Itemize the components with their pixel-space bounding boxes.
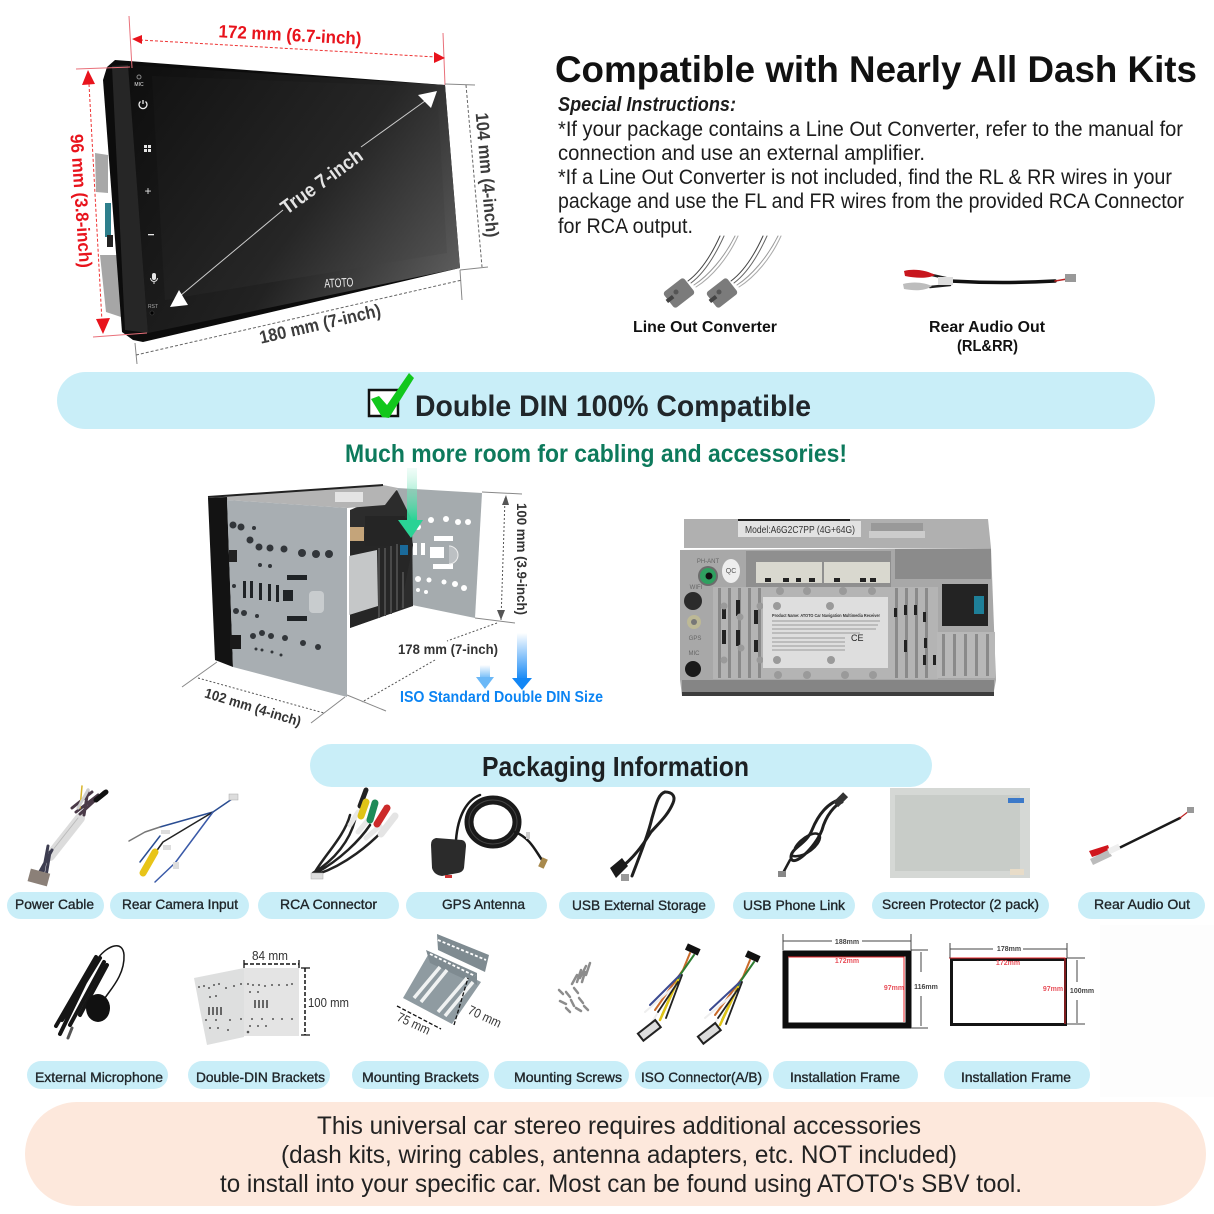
special instructions text: Special Instructions:	[558, 94, 736, 116]
faint panel at right edge	[1100, 925, 1214, 1097]
icon: gps antenna	[431, 795, 548, 878]
banner: double din compatible	[57, 372, 1155, 429]
left side bracket	[227, 500, 347, 697]
iso standard label: ISO Standard Double DIN Size	[400, 689, 603, 706]
pill: iso connector	[635, 1061, 769, 1089]
icon: brackets with dimensions	[194, 949, 349, 1045]
notice text: This universal car stereo requires additional accessories	[317, 1112, 921, 1140]
pill: installation frame: Installation Frame	[790, 1069, 900, 1085]
special instructions text: *If a Line Out Converter is not included, find the RL & RR wires in your	[558, 166, 1172, 189]
pill: usb external storage	[559, 892, 715, 919]
din connector	[942, 584, 988, 626]
icon: usb phone cable	[778, 792, 848, 877]
pill: gps antenna: GPS Antenna	[442, 896, 525, 912]
pill: mounting brackets: Mounting Brackets	[362, 1069, 479, 1085]
pill: power cable: Power Cable	[15, 896, 94, 912]
packaging heading: Packaging Information	[482, 751, 749, 782]
icon: iso connector a	[638, 943, 701, 1041]
banner: packaging information	[310, 744, 932, 787]
special instructions text: for RCA output.	[558, 215, 693, 238]
pill: mounting brackets	[352, 1061, 489, 1089]
diagram: frame 178 mm: 178mm	[997, 946, 1021, 953]
item: rca connector	[258, 790, 399, 919]
touch buttons: +	[144, 184, 152, 198]
diagram: frame 188 mm	[783, 934, 938, 1028]
icon: usb storage cable	[610, 792, 674, 881]
item: power cable	[7, 786, 106, 919]
dimension: width 180 mm: 180 mm (7-inch)	[257, 300, 383, 348]
callout: additional accessories notice	[25, 1102, 1206, 1206]
ports: PH-ANT	[697, 559, 719, 565]
item: mounting screws	[494, 963, 629, 1089]
item: external microphone	[27, 946, 168, 1089]
chassis body	[680, 548, 996, 696]
product label: CE	[851, 633, 864, 643]
notice text: to install into your specific car. Most can be found using ATOTO's SBV tool.	[220, 1170, 1022, 1198]
icon: brackets with dimensions: 84 mm	[252, 949, 288, 963]
dimension: width 180 mm	[135, 270, 462, 364]
pill: rca connector	[258, 892, 399, 919]
banner text: Double DIN 100% Compatible	[415, 390, 811, 423]
blue iso arrows	[476, 633, 532, 690]
top plate with model sticker: Model:A6G2C7PP (4G+64G)	[745, 524, 855, 536]
icon: mounting bracket: 75 mm	[395, 1009, 433, 1038]
dimension: 178 mm: 178 mm (7-inch)	[398, 641, 498, 657]
pill: mounting screws: Mounting Screws	[514, 1069, 622, 1085]
item: iso connector	[635, 943, 769, 1089]
touch buttons: RST	[148, 304, 158, 310]
icon: green check box	[369, 373, 414, 418]
item: rear camera input	[110, 794, 249, 919]
pill: screen protector: Screen Protector (2 pack)	[882, 896, 1039, 912]
dimension: 100 mm: 100 mm (3.9-inch)	[514, 503, 530, 615]
pill: usb external storage: USB External Storage	[572, 897, 706, 913]
icon: mounting bracket: 70 mm	[466, 1002, 504, 1031]
screen	[152, 76, 447, 300]
label: rear audio out rl rr: Rear Audio Out	[929, 319, 1046, 336]
icon: power cable	[28, 786, 106, 886]
true 7-inch label: True 7-inch	[277, 145, 367, 219]
item: usb phone link	[733, 792, 855, 919]
rear view of head unit	[680, 519, 996, 696]
icon: brackets with dimensions: 100 mm	[308, 996, 349, 1010]
touch buttons	[134, 75, 158, 315]
label: rear audio out rl rr	[929, 319, 1046, 355]
front glass	[128, 65, 460, 333]
bottom rail	[682, 680, 994, 696]
diagram: frame 178 mm: 172mm	[996, 960, 1020, 967]
icon: microphone	[56, 946, 124, 1038]
dimension: 102 mm: 102 mm (4-inch)	[203, 685, 303, 729]
icon: iso connector b	[698, 950, 761, 1044]
diagonal arrow	[170, 91, 437, 307]
ports: WIFI	[690, 585, 703, 591]
label: rear audio out rl rr: (RL&RR)	[957, 338, 1018, 355]
ports: MIC	[688, 651, 700, 657]
black faceplate edge	[208, 497, 233, 667]
dimension: height 96 mm: 96 mm (3.8-inch)	[66, 133, 96, 268]
diagram: frame 188 mm: 188mm	[835, 939, 859, 946]
icon: screen protector	[890, 788, 1030, 878]
dimension: height 104 mm	[445, 84, 502, 270]
dimension: 102 mm	[182, 662, 345, 729]
head unit front with dimensions	[66, 16, 502, 364]
item: mounting brackets	[352, 934, 504, 1089]
pill: external microphone	[27, 1061, 168, 1089]
diagram: frame 188 mm: 97mm	[884, 985, 904, 992]
special instructions text: connection and use an external amplifier.	[558, 142, 925, 165]
ports: QC	[726, 568, 736, 575]
pill: installation frame: Installation Frame	[961, 1069, 1071, 1085]
dimension: height 96 mm	[66, 67, 147, 337]
heat sink fins	[713, 587, 938, 679]
white plugs	[756, 562, 890, 583]
item: rear audio out	[1078, 807, 1205, 919]
top plate with model sticker	[684, 519, 991, 548]
green down arrow	[398, 468, 423, 538]
dimension: 100 mm	[475, 492, 530, 623]
pill: rca connector: RCA Connector	[280, 896, 377, 912]
icon: mounting bracket	[395, 934, 504, 1038]
diagram: frame 188 mm: 116mm	[914, 984, 938, 991]
lower right fins	[937, 632, 995, 678]
label: line out converter: Line Out Converter	[633, 319, 777, 336]
dimension: 178 mm	[347, 623, 498, 711]
product label	[763, 597, 888, 668]
item: double din brackets	[188, 949, 349, 1089]
pill: installation frame	[773, 1061, 918, 1089]
right side bracket	[397, 488, 482, 618]
rear bracket behind head unit	[95, 153, 124, 318]
pill: gps antenna	[406, 892, 547, 919]
dimension: height 104 mm: 104 mm (4-inch)	[472, 112, 502, 238]
subtitle: much more room: Much more room for cabling and accessories!	[345, 440, 847, 468]
diagram: frame 178 mm: 100mm	[1070, 988, 1094, 995]
item: installation frame 188 mm	[773, 934, 938, 1089]
icon: rear audio out cable	[903, 270, 1076, 290]
item: usb external storage	[559, 792, 715, 919]
diagram: frame 178 mm	[949, 943, 1094, 1024]
diagram: frame 188 mm: 172mm	[835, 958, 859, 965]
dimension: width 172 mm	[129, 16, 445, 85]
special instructions text: *If your package contains a Line Out Converter, refer to the manual for	[558, 118, 1183, 141]
icon: screws	[559, 963, 590, 1012]
notice text: (dash kits, wiring cables, antenna adapters, etc. NOT included)	[281, 1141, 957, 1169]
notice text	[220, 1112, 1022, 1198]
touch buttons: MIC	[134, 82, 144, 88]
ports	[684, 559, 740, 677]
title: Compatible with Nearly All Dash Kits	[555, 49, 1197, 90]
special instructions text	[558, 94, 1184, 238]
pill: double din brackets: Double-DIN Brackets	[196, 1069, 325, 1085]
pill: installation frame	[944, 1061, 1090, 1089]
icon: rca wires	[311, 790, 395, 879]
item: gps antenna	[406, 795, 548, 919]
ports: GPS	[689, 636, 701, 642]
pill: rear audio out: Rear Audio Out	[1094, 896, 1190, 912]
chassis with din dimensions	[182, 468, 603, 729]
ATOTO logo: ATOTO	[324, 275, 354, 291]
left edge strip	[112, 65, 148, 333]
pill: usb phone link: USB Phone Link	[743, 897, 846, 913]
pill: double din brackets	[188, 1061, 330, 1089]
product label: Product Name: ATOTO Car Navigation Multimedia Receiver	[772, 613, 880, 618]
pill: external microphone: External Microphone	[35, 1069, 163, 1085]
item: installation frame 178 mm	[944, 943, 1094, 1089]
diagram: frame 178 mm: 97mm	[1043, 986, 1063, 993]
special instructions text: package and use the FL and FR wires from the provided RCA Connector	[558, 190, 1184, 213]
pill: iso connector: ISO Connector(A/B)	[641, 1069, 762, 1085]
internal unit with heat sink	[208, 485, 413, 628]
dimension: width 172 mm: 172 mm (6.7-inch)	[218, 21, 362, 49]
pill: screen protector	[872, 892, 1049, 919]
device body	[103, 60, 460, 342]
pill: rear camera input: Rear Camera Input	[122, 896, 238, 912]
icon: rear audio cable	[1089, 807, 1194, 865]
icon: line out converter	[663, 236, 781, 309]
item: screen protector	[872, 788, 1049, 919]
icon: rear camera wires	[129, 794, 238, 882]
